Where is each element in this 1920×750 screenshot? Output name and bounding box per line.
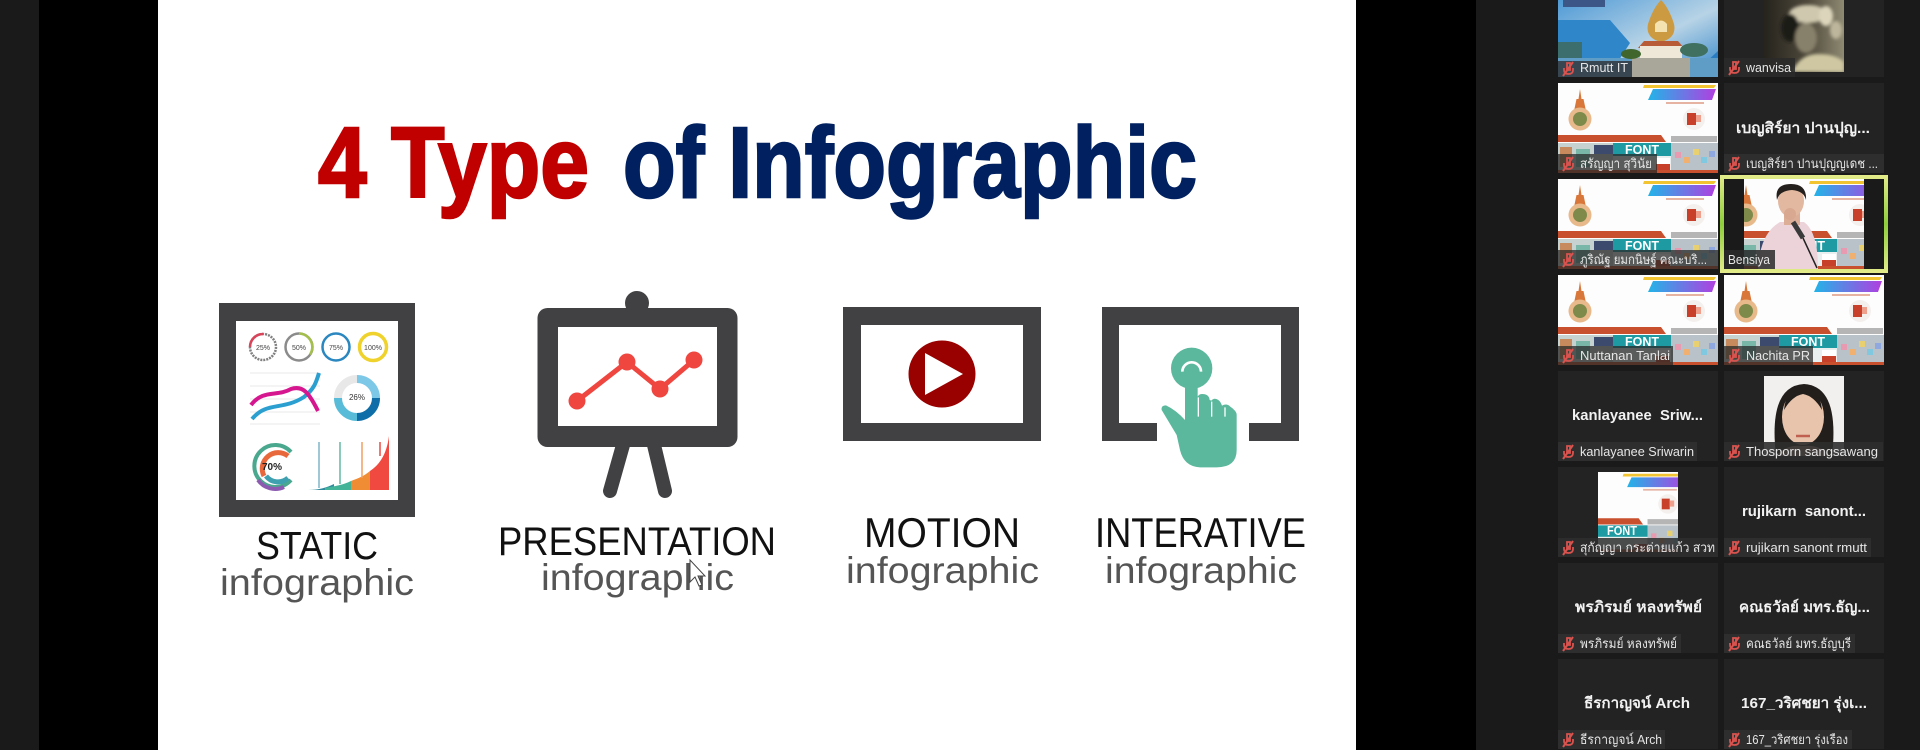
speaker figure (1758, 184, 1818, 269)
participant tile: kanlayanee Sriwarin: kanlayanee Sriwarin (1580, 444, 1694, 459)
area chart with pins (308, 436, 389, 490)
icon: presentation board (538, 291, 738, 491)
participant tile: rujikarn: rujikarn sanont rmutt (1746, 540, 1867, 555)
line chart (250, 373, 320, 424)
participant tile: wanvisa: wanvisa (1745, 60, 1792, 75)
participant tile: slide thumb 1 (1558, 83, 1718, 173)
label: motion: infographic (846, 550, 1039, 591)
participant tile: slide thumb 2 (1558, 179, 1718, 269)
radial chart (254, 445, 291, 489)
participant tile: Rmutt IT (1558, 0, 1718, 77)
participant tile: name only 4 (1558, 659, 1718, 749)
label: static: STATIC (256, 525, 378, 568)
participant tile: name only 1: เบญสิร์ยา ปานปุญญเดช ... (1746, 156, 1878, 172)
panel: presentation infographic (498, 291, 776, 598)
participant tile: name only 4: ธีรกาญจน์ Arch (1584, 694, 1690, 712)
participant tile: kanlayanee Sriwarin (1558, 371, 1718, 461)
participant tile: name only 2: พรภิรมย์ หลงทรัพย์ (1575, 598, 1702, 616)
four progress rings: 50% (292, 345, 306, 352)
participant tile: Nuttanan Tanlai: Nuttanan Tanlai (1580, 348, 1670, 363)
label: presentation: infographic (541, 557, 734, 598)
participant tile: rujikarn: rujikarn sanont... (1742, 503, 1866, 520)
participant tile: name only 2 (1558, 563, 1718, 653)
participant tile: name only 2: พรภิรมย์ หลงทรัพย์ (1580, 636, 1677, 651)
participant tile: Nachita PR: FONT (1791, 334, 1825, 349)
four progress rings: 25% (256, 345, 270, 352)
participant tile: name only 3: คณธวัลย์ มทร.ธัญบุรี (1746, 636, 1851, 652)
label: interative (1095, 509, 1306, 591)
participant tile: name only 3 (1724, 563, 1884, 653)
title (318, 107, 1197, 219)
participant tile: Nuttanan Tanlai (1558, 275, 1718, 365)
participant tile: Rmutt IT: Rmutt IT (1580, 60, 1628, 75)
four progress rings (250, 334, 386, 360)
participant tile: wanvisa (1724, 0, 1884, 77)
participant tile: name only 3: คณธวัลย์ มทร.ธัญ... (1739, 598, 1870, 616)
participant tile: Nuttanan Tanlai: FONT (1625, 334, 1659, 349)
participant tile: name only 1 (1724, 83, 1884, 173)
icon: touch screen with pointing hand (1102, 307, 1299, 467)
participant tile: Nachita PR (1724, 275, 1884, 365)
participant tile: Nachita PR: Nachita PR (1746, 348, 1810, 363)
icon: video frame with play button (843, 307, 1041, 441)
participant tile: name only 4: ธีรกาญจน์ Arch (1580, 732, 1662, 747)
panel: shared slide (158, 0, 1356, 750)
donut chart (338, 379, 376, 417)
participant tile: kanlayanee Sriwarin: kanlayanee Sriw... (1572, 407, 1703, 424)
participant tile: small slide thumb (1547, 467, 1718, 557)
four progress rings: 100% (364, 345, 382, 352)
participant tile: slide thumb 2: FONT (1625, 238, 1659, 253)
participant tile: name only 5 (1724, 659, 1884, 749)
panel: participant sidebar (1547, 0, 1888, 749)
right black letterbox (1356, 0, 1476, 750)
panel: interactive infographic (1095, 307, 1306, 591)
participant tile: Thosporn sangsawang (1724, 371, 1884, 461)
label: presentation: PRESENTATION (498, 520, 776, 564)
radial chart: 70% (262, 462, 282, 473)
panel: motion infographic (843, 307, 1041, 591)
active speaker tile: Bensiya: FONT (1791, 238, 1825, 253)
participant tile: small slide thumb: สุกัญญา กระต่ายแก้ว สวท (1580, 540, 1715, 556)
icon: framed static infographic (219, 303, 415, 517)
active speaker tile: Bensiya (1720, 175, 1888, 273)
chart line (568, 352, 702, 410)
participant tile: slide thumb 2: ภูริณัฐ ยมกนิษฐ์ คณะบริ... (1580, 252, 1707, 268)
participant tile: slide thumb 1: สรัญญา สุวินัย (1580, 156, 1652, 172)
four progress rings: 75% (329, 345, 343, 352)
participant tile: rujikarn (1724, 467, 1884, 557)
label: interative: infographic (1105, 550, 1297, 591)
donut chart: 26% (349, 393, 365, 402)
label: static (220, 525, 414, 603)
left black letterbox (39, 0, 158, 750)
label: motion: MOTION (864, 509, 1020, 556)
icon: mouse cursor (690, 560, 705, 586)
label: motion (846, 509, 1039, 591)
label: interative: INTERATIVE (1095, 509, 1306, 556)
participant tile: Thosporn sangsawang: Thosporn sangsawang (1746, 444, 1878, 459)
participant tile: name only 5: 167_วริศชยา รุ่งเรือง (1746, 732, 1848, 748)
title: 4 Type (318, 107, 589, 219)
participant tile: small slide thumb: FONT (1607, 523, 1637, 538)
participant tile: name only 5: 167_วริศชยา รุ่งเ... (1741, 694, 1867, 713)
participant tile: slide thumb 1: FONT (1625, 142, 1659, 157)
active speaker tile: Bensiya: Bensiya (1728, 252, 1771, 267)
participant tile: name only 1: เบญสิร์ยา ปานปุญ... (1736, 119, 1870, 138)
title: of Infographic (623, 107, 1197, 219)
panel: static infographic (219, 303, 415, 603)
label: static: infographic (220, 562, 414, 603)
label: presentation (498, 520, 776, 598)
